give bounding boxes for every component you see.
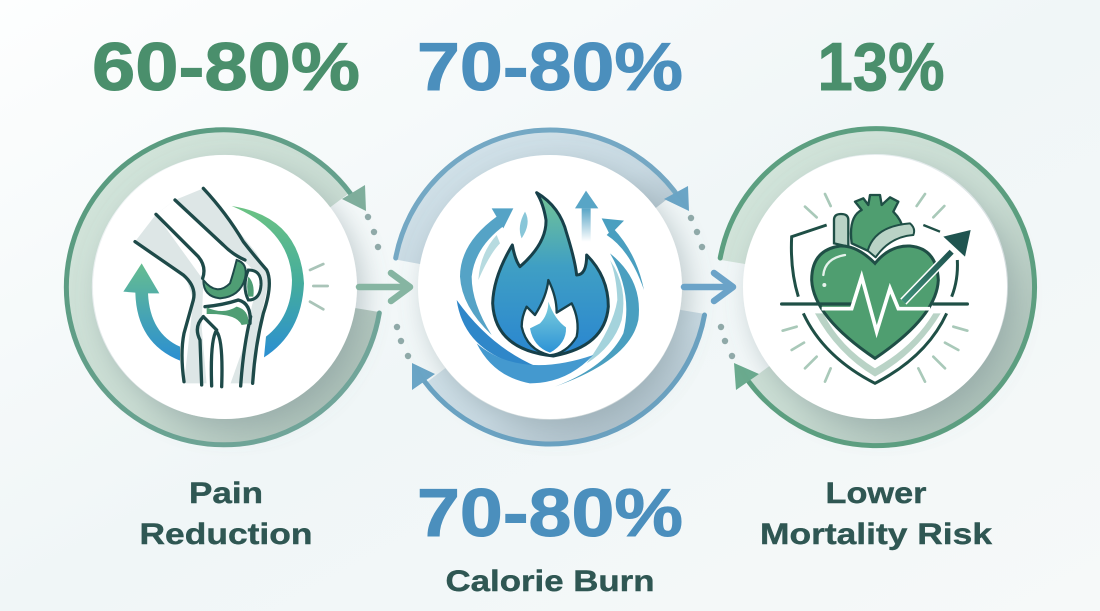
stat: 70-80% top: 70-80% [417,29,683,105]
label: pain reduction: Reduction [140,518,312,551]
stat: 13%: 13% [818,29,944,105]
arrow: blue connector [684,273,733,301]
stat: 70-80% bottom: 70-80% [417,475,683,551]
panel: calorie burn circle [396,130,704,444]
stat: 60-80%: 60-80% [92,29,360,105]
panel: pain reduction circle [66,130,379,445]
arrow: green connector [359,273,410,301]
label: calorie burn: Calorie Burn [446,565,654,598]
label: pain reduction: Pain [189,477,263,510]
dotted connectors [365,214,735,359]
icon: flame [457,191,644,387]
label: lower mortality risk: Mortality Risk [760,518,992,551]
label: pain reduction [140,477,312,551]
label: lower mortality risk [760,477,992,551]
label: lower mortality risk: Lower [826,477,927,510]
icon: knee joint [123,188,328,387]
icon: heart and shield [782,194,971,383]
panel: lower mortality risk circle [720,129,1034,446]
